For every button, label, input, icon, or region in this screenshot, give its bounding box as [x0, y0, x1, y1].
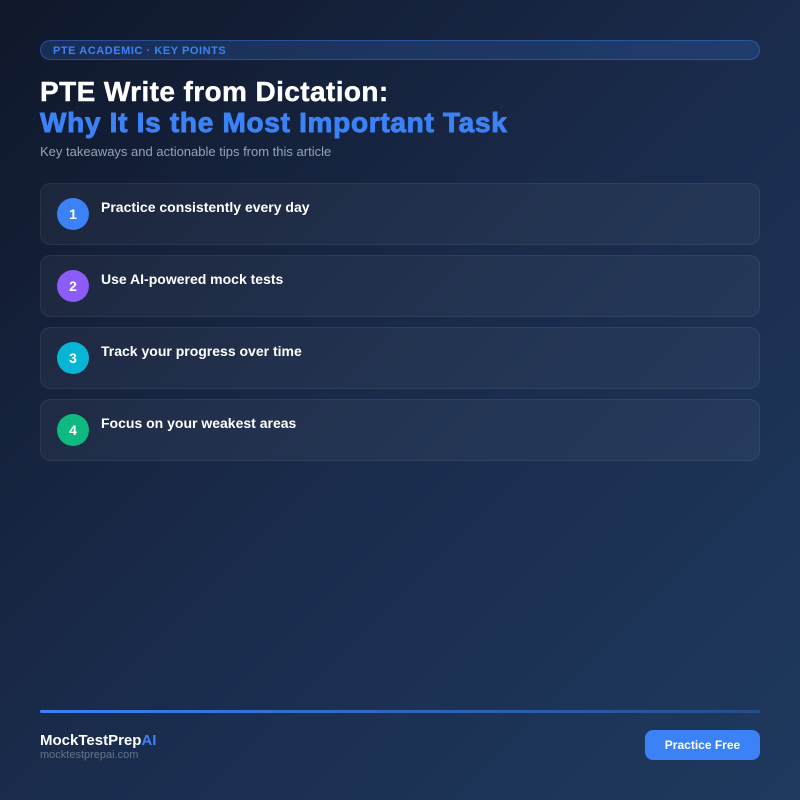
button: call to action [645, 730, 760, 760]
icon: number 2 [57, 270, 89, 302]
title [40, 76, 508, 138]
panel: key point 2 [40, 255, 760, 317]
icon: number 4 [57, 414, 89, 446]
panel: key point 1 [40, 183, 760, 245]
icon: number 1: 1 [69, 206, 77, 222]
icon: number 3: 3 [69, 350, 77, 366]
brand block [40, 732, 156, 761]
text: key point 1: Practice consistently every day [101, 199, 310, 215]
icon: number 3 [57, 342, 89, 374]
icon: number 4: 4 [69, 422, 77, 438]
badge: category label [40, 40, 760, 60]
panel: key point 3 [40, 327, 760, 389]
icon: number 1 [57, 198, 89, 230]
text: key point 3: Track your progress over time [101, 343, 302, 359]
brand URL: mocktestprepai.com [40, 749, 138, 761]
text: key point 2: Use AI-powered mock tests [101, 271, 283, 287]
brand name: MockTestPrepAI [40, 732, 156, 749]
button: call to action: Practice Free [665, 738, 740, 752]
badge: category label: PTE ACADEMIC · KEY POINTS [53, 45, 226, 57]
panel: key point 4 [40, 399, 760, 461]
text: key point 4: Focus on your weakest areas [101, 415, 296, 431]
subtitle: Key takeaways and actionable tips from this article [40, 144, 331, 159]
title: Why It Is the Most Important Task [40, 107, 508, 138]
title: PTE Write from Dictation: [40, 76, 389, 107]
icon: number 2: 2 [69, 278, 77, 294]
footer rule [40, 710, 760, 713]
